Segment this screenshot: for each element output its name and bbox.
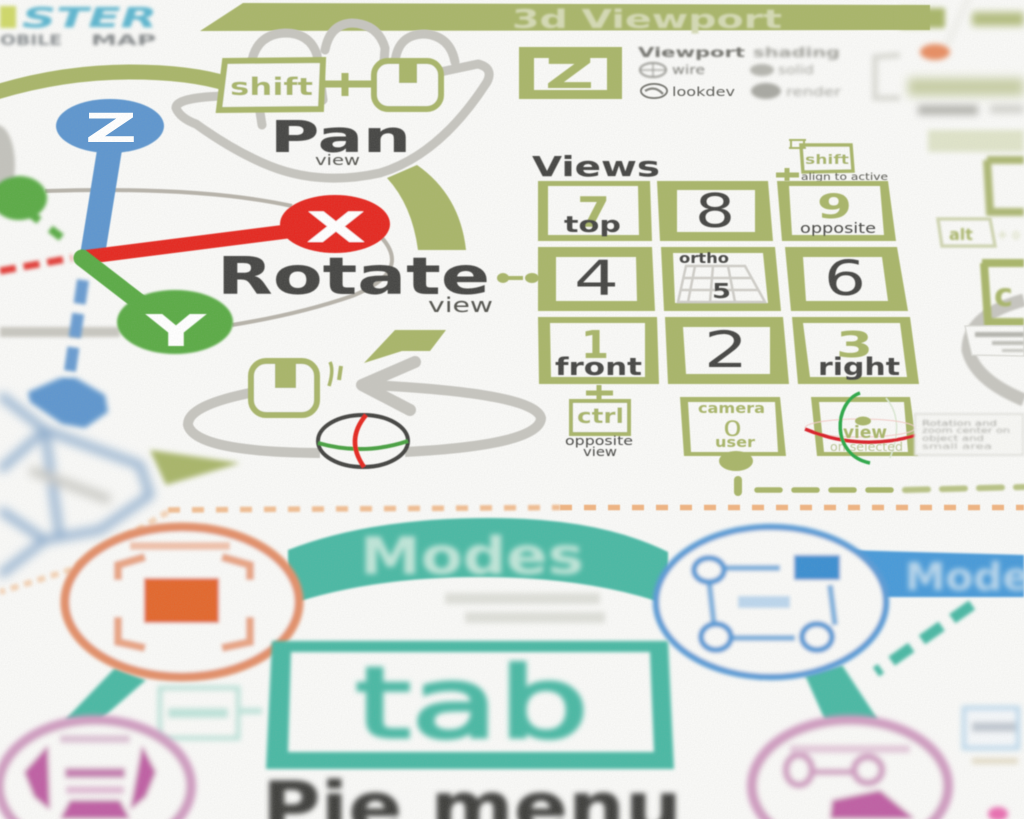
key 7 top [538, 181, 652, 241]
key: shift plus mouse: shift [230, 73, 313, 101]
shape: blurred blue wire object [0, 395, 150, 575]
key 4: 4 [574, 251, 619, 307]
note: rotation and zoom: Rotation and [922, 419, 997, 428]
key 5 ortho [661, 247, 781, 311]
key: camera 0 user: user [715, 435, 755, 451]
banner: 3d Viewport: 3d Viewport [512, 5, 782, 35]
key 9 opposite: opposite [800, 221, 876, 237]
heading: Rotate view: view [428, 293, 493, 317]
pale blue key and pink mark [964, 708, 1018, 819]
logo: cluster mobile map [0, 1, 157, 49]
connector: rotate to views [497, 273, 542, 283]
logo: cluster mobile map: MAP [91, 33, 156, 49]
heading: Pan view: Pan [270, 112, 411, 163]
gizmo: Z axis: Z [85, 106, 137, 152]
panel: blurred right key: c [994, 276, 1013, 314]
note: rotation and zoom: object and [922, 434, 984, 443]
key: ctrl opposite view: opposite [565, 434, 633, 448]
banner: 3d Viewport [200, 3, 1024, 35]
key: camera 0 user: camera [698, 401, 765, 417]
key 3 right: right [818, 353, 900, 381]
heading: Views: Views [532, 150, 660, 183]
connector: orange dashed line [0, 508, 1024, 592]
panel: blurred upper right: + o [997, 228, 1020, 243]
hand icon: pan [176, 23, 489, 178]
arch: teal Modes band [288, 518, 668, 623]
key 1 front [538, 317, 659, 384]
heading: Rotate view [217, 247, 493, 317]
key: shift align to active: align to active [801, 172, 888, 183]
key: view on selected [805, 393, 918, 463]
legend: viewport shading [638, 46, 841, 99]
key 6: 6 [824, 251, 866, 307]
key 3 right [792, 317, 919, 384]
panel: blurred right key [965, 263, 1024, 400]
key: camera 0 user: 0 [723, 417, 742, 441]
key 9 opposite [777, 181, 896, 241]
key: ctrl opposite view: view [583, 445, 617, 459]
key: shift align to active: shift [805, 153, 849, 168]
chevron: green pointer [364, 330, 446, 363]
orbit: gray rotation loop with arrow [188, 362, 541, 453]
note: rotation and zoom [915, 414, 1023, 455]
gizmo: Y axis: Y [144, 306, 208, 357]
key 3 right: 3 [836, 325, 873, 366]
key: view on selected: view [843, 423, 887, 443]
key 2: 2 [704, 321, 748, 379]
key: shift pale [160, 688, 262, 738]
arrow: blurred green [150, 450, 240, 485]
key 8: 8 [695, 184, 735, 238]
key 5 ortho: 5 [712, 279, 731, 303]
key: tab: tab [355, 647, 589, 761]
key 7 top: top [564, 213, 621, 238]
mode node: sculpt (purple, left) [0, 720, 191, 819]
legend: viewport shading: render [786, 85, 841, 99]
key: ctrl opposite view: ctrl [577, 404, 624, 428]
key 1 front: front [555, 353, 642, 381]
legend: viewport shading: lookdev [672, 84, 736, 99]
panel: blurred upper right: alt [949, 225, 973, 244]
key 7 top: 7 [577, 188, 610, 237]
logo: cluster mobile map: OBILE [0, 33, 62, 49]
icon: rotation ball [318, 415, 408, 467]
heading: Rotate view: Rotate [217, 247, 490, 307]
key 4 [538, 247, 655, 311]
key: Z viewport shading: Z [545, 50, 594, 98]
mode node: edit (blue) [656, 527, 1024, 677]
key 8 [657, 181, 773, 241]
key: ctrl opposite view [565, 385, 633, 459]
gizmo: X axis [85, 195, 390, 263]
mode node: object (orange) [65, 527, 299, 677]
key 6 [785, 247, 908, 311]
arcs: lower teal band [65, 665, 878, 720]
key: tab [266, 641, 674, 769]
note: rotation and zoom: small area [922, 442, 992, 451]
heading: Pan view [270, 112, 411, 169]
legend: viewport shading: shading [753, 46, 840, 61]
key: shift plus mouse [219, 60, 441, 110]
heading: Pan view: view [315, 153, 360, 169]
numpad views grid [538, 181, 919, 384]
mode node: weight paint (purple, right) [752, 720, 948, 819]
logo: cluster mobile map: STER [22, 1, 157, 34]
orbit line behind axes [0, 190, 392, 332]
icon: mouse with wheel [251, 361, 341, 415]
key: camera 0 user [680, 397, 786, 471]
gizmo: blurred left nodes [0, 125, 72, 271]
gizmo: Z axis [28, 99, 164, 428]
key: Z viewport shading [519, 47, 622, 99]
gizmo: X axis: X [306, 203, 366, 252]
note: rotation and zoom: zoom center on [922, 426, 1010, 435]
mode node: edit (blue): Mode [905, 555, 1024, 599]
key 5 ortho: ortho [679, 251, 729, 267]
panel: blurred upper right [875, 0, 1024, 246]
connector: dashed line from camera [738, 480, 1024, 492]
arch: teal Modes band: Modes [360, 527, 584, 587]
connector: teal dashed [876, 605, 972, 672]
main green branch [0, 72, 466, 250]
key: shift align to active [776, 140, 888, 183]
key 1 front: 1 [581, 323, 609, 367]
legend: viewport shading: solid [778, 63, 814, 77]
gizmo: Y axis [82, 258, 233, 357]
key: view on selected: on selected [830, 440, 903, 454]
key 9 opposite: 9 [817, 187, 852, 227]
legend: viewport shading: Viewport [638, 46, 745, 61]
legend: viewport shading: wire [672, 63, 705, 77]
key 2 [665, 317, 789, 384]
